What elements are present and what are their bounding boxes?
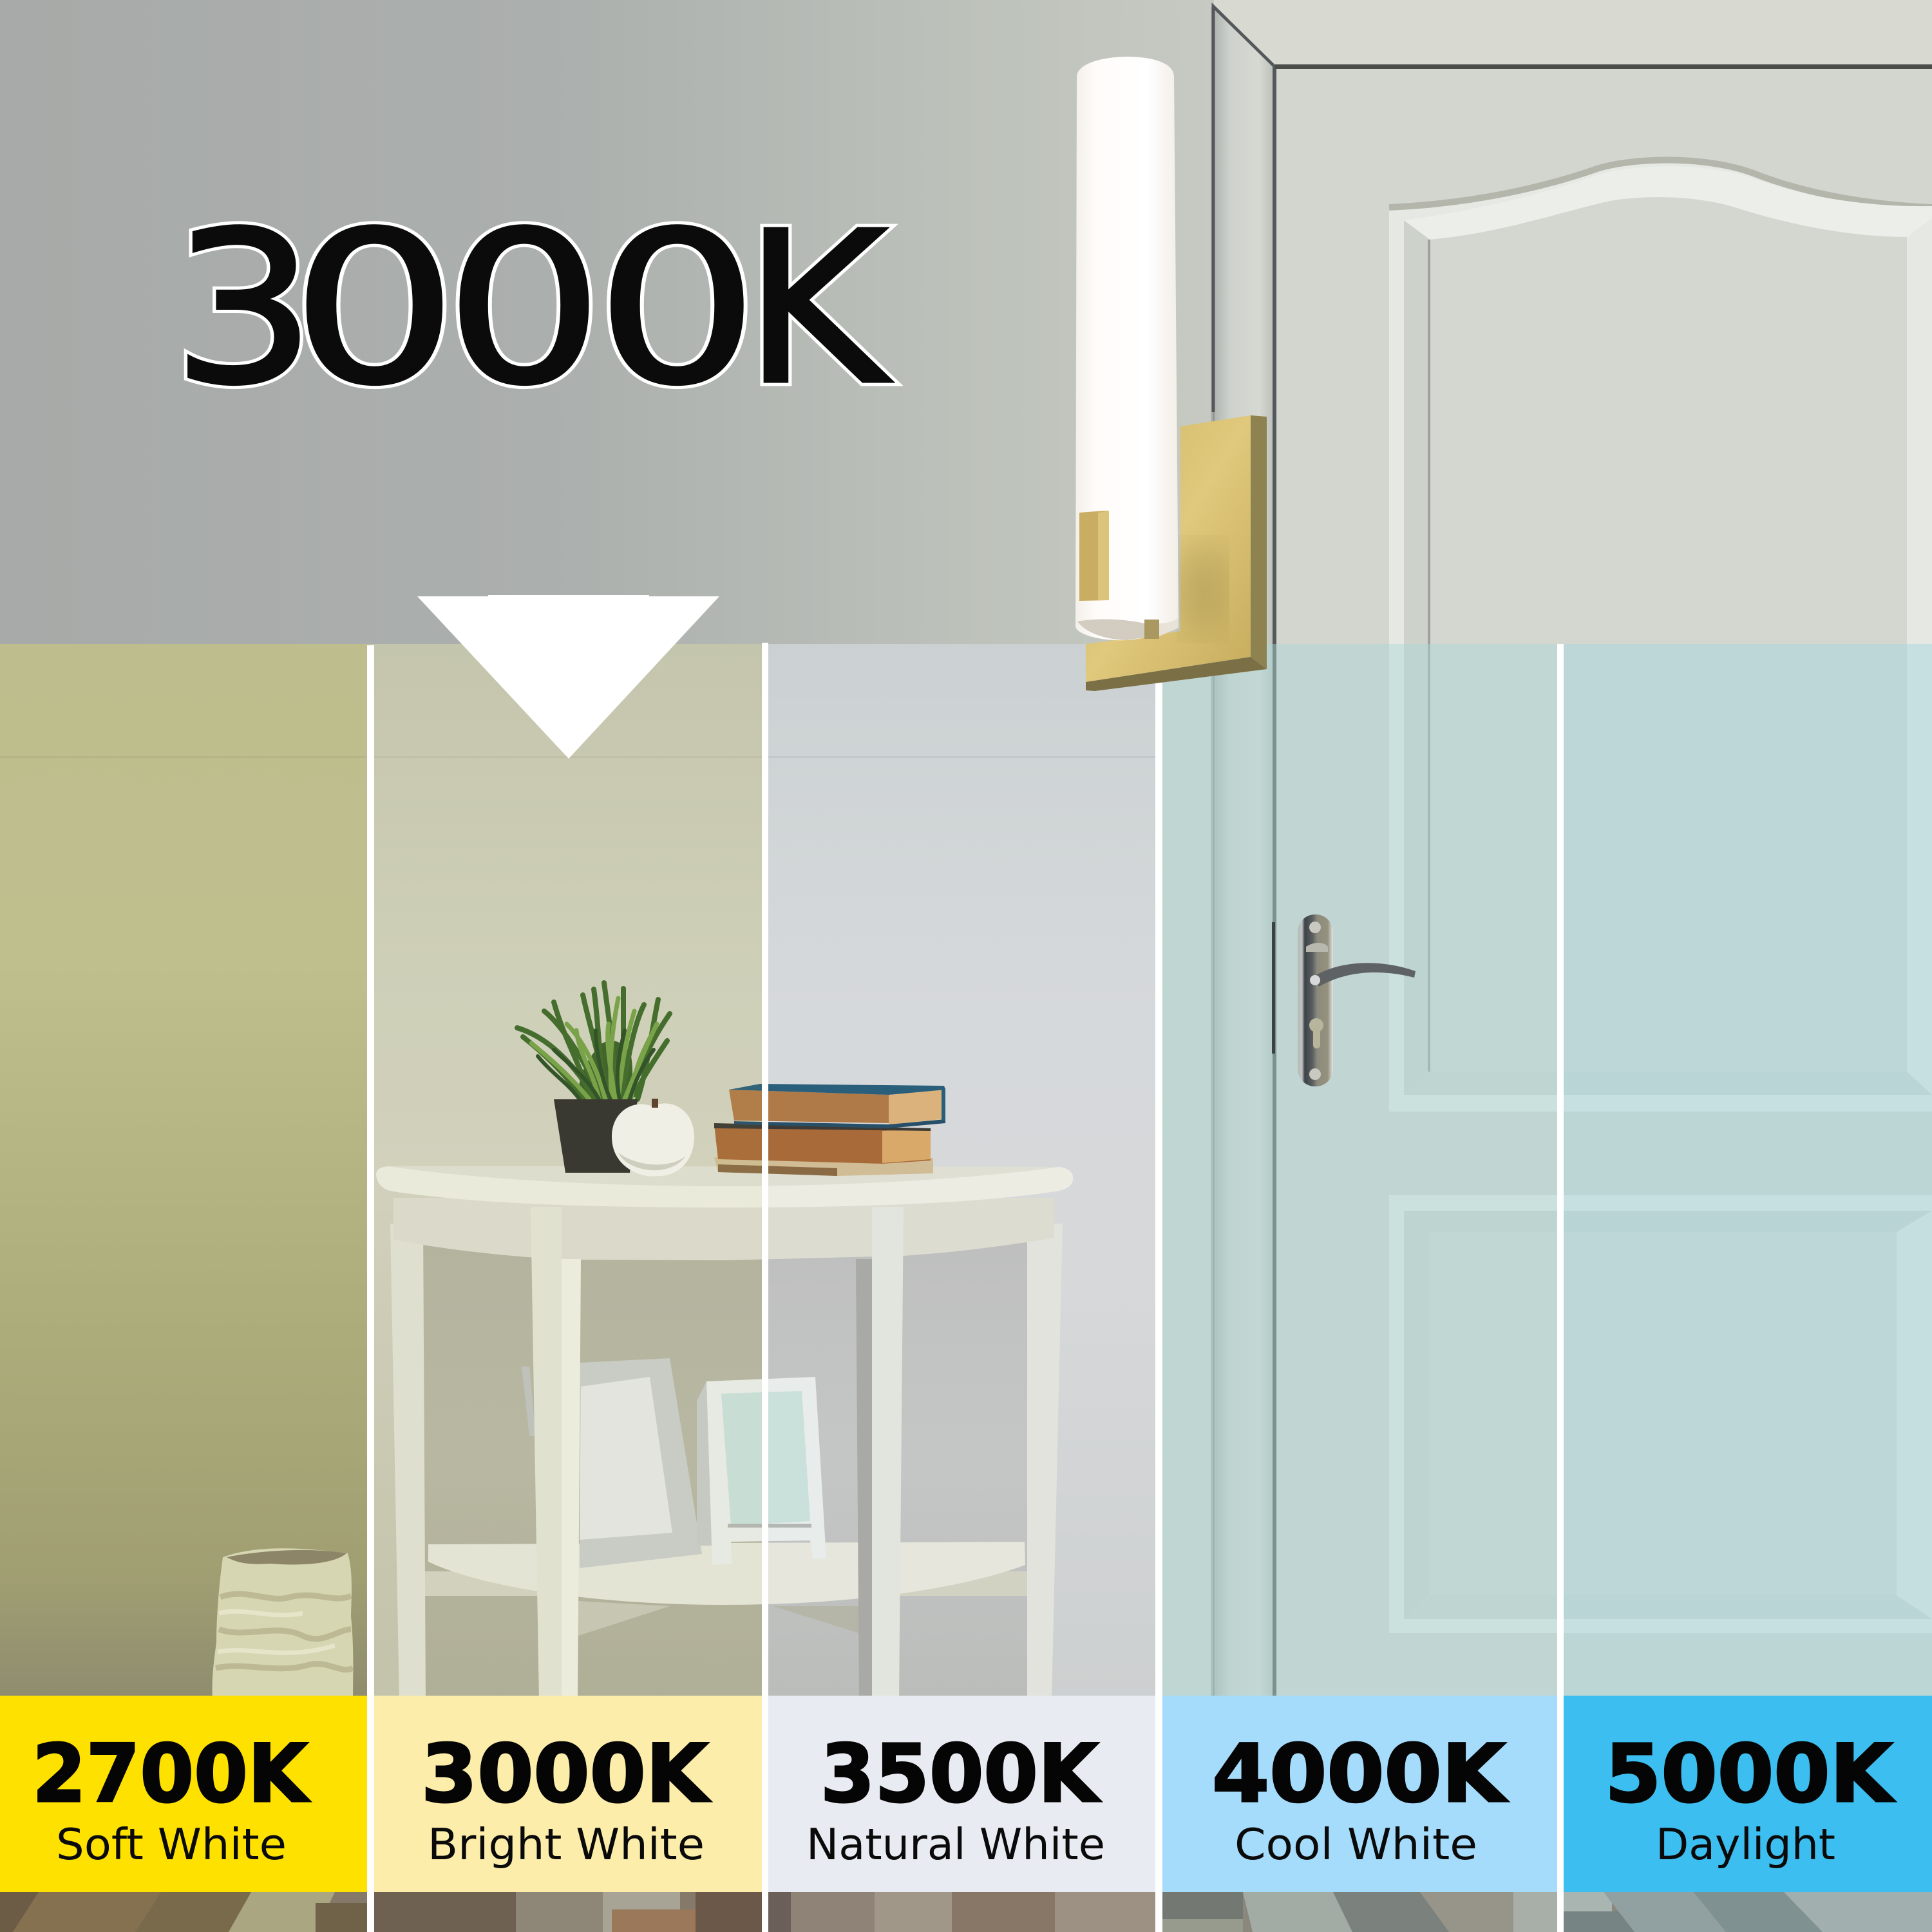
color tint: 3000K objects: [374, 644, 762, 1700]
picture frame: silver: [522, 1358, 702, 1568]
color tint: 4000K door: [1162, 644, 1557, 1700]
lower shelf: [428, 1542, 1025, 1605]
sconce glass shade: [1075, 57, 1179, 640]
table apron: [393, 1198, 1054, 1260]
color tint: 5000K door: [1564, 644, 1932, 1700]
stacked books: [714, 1084, 945, 1176]
label: Cool White: Cool White: [1235, 1819, 1477, 1870]
panel: 5000K Daylight: [1564, 1696, 1932, 1892]
bottom book: [714, 1157, 933, 1176]
title: 3000K: 0: [291, 187, 458, 431]
title: 3000K: 3: [172, 187, 316, 431]
title: 3000K: 0: [445, 187, 603, 431]
table top: [376, 1166, 1073, 1208]
panel: 3500K Natural White: [768, 1696, 1155, 1892]
top book: [729, 1084, 945, 1128]
wall: 3000K tinted band: [370, 644, 765, 1700]
middle book: [714, 1123, 931, 1164]
door handle: [1272, 914, 1416, 1086]
left rear leg: [390, 1224, 426, 1700]
label: 2700K: 2700K: [32, 1728, 310, 1821]
brace under shelf right: [773, 1606, 859, 1633]
brace under shelf: [578, 1601, 670, 1636]
door casing: [1211, 0, 1932, 1700]
front left leg: [531, 1207, 581, 1700]
wall: 2700K tinted band: [0, 644, 370, 1700]
shadow behind the table: [412, 1224, 1030, 1700]
plant: leaves: [517, 983, 670, 1099]
label: Soft White: Soft White: [56, 1819, 287, 1870]
title: 3000K: 0: [291, 187, 458, 431]
shelf underside band: [425, 1571, 1027, 1596]
indicator arrow: white triangle: [417, 595, 719, 759]
table top surface: [389, 1166, 1059, 1186]
title: 3000K: K: [744, 187, 894, 431]
floor: wood planks: [0, 1892, 1932, 1932]
label: 3000K: 3000K: [421, 1728, 711, 1821]
label: 3500K: 3500K: [820, 1728, 1101, 1821]
wall: 3500K tinted band: [765, 644, 1159, 1700]
title: 3000K: 0: [596, 187, 759, 431]
white divider lines: [367, 643, 1564, 1932]
front right leg: [856, 1207, 904, 1700]
title: 3000K: K: [744, 187, 894, 431]
panel: 2700K Soft White: [0, 1696, 367, 1892]
title: 3000K: [172, 187, 894, 431]
label: Bright White: Bright White: [428, 1819, 705, 1870]
label: 5000K: 5000K: [1605, 1728, 1895, 1821]
door slab: [1273, 64, 1932, 1703]
title: 3000K: 0: [596, 187, 759, 431]
right rear leg: [1027, 1224, 1063, 1700]
upper door panel: [1389, 160, 1932, 1112]
ceramic apple: [612, 1099, 694, 1177]
floor tint: blue bands: [1162, 1892, 1932, 1932]
wall: neutral top section: [0, 0, 1224, 644]
title: 3000K: 3: [172, 187, 316, 431]
panel: 3000K Bright White: [374, 1696, 762, 1892]
plant pot: [554, 1099, 638, 1173]
console table: [376, 1166, 1073, 1700]
label: Daylight: Daylight: [1656, 1819, 1835, 1870]
label: 4000K: 4000K: [1212, 1728, 1508, 1821]
vase: [212, 1548, 353, 1700]
title: 3000K: 0: [445, 187, 603, 431]
sconce back plate: [1086, 415, 1267, 691]
sconce clip: [1079, 511, 1109, 601]
panel: 4000K Cool White: [1162, 1696, 1557, 1892]
lower door panel: [1389, 1195, 1932, 1633]
label: Natural White: Natural White: [806, 1819, 1105, 1870]
wall: 4000K tinted sliver: [1159, 644, 1224, 1700]
wall sconce: [1075, 57, 1267, 691]
picture frame: white with mint glass: [697, 1377, 826, 1565]
wall seam: [0, 756, 1159, 758]
extra warm shadow behind the table: [412, 1224, 762, 1700]
